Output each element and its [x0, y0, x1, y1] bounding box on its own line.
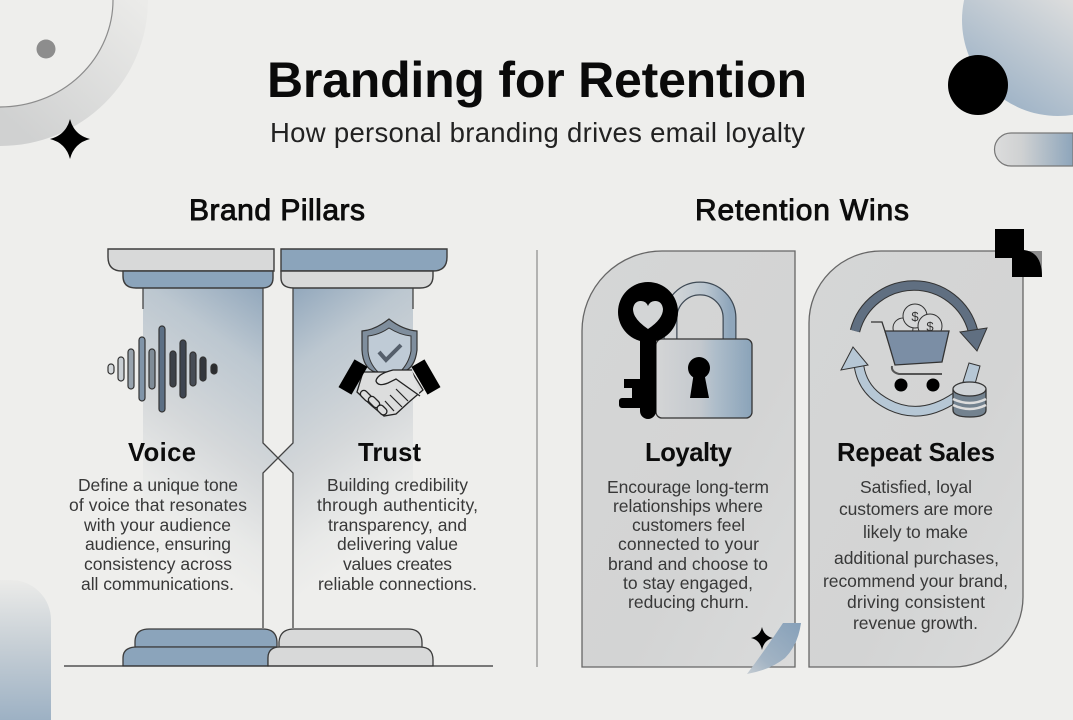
body: loyalty: customers feel — [632, 515, 745, 535]
body: voice: with your audience — [83, 515, 231, 535]
icon: sound wave — [108, 326, 217, 412]
body: voice: all communications. — [81, 574, 234, 594]
heading: Loyalty: Loyalty — [645, 439, 733, 467]
decoration: black corner shape — [995, 229, 1042, 277]
body: trust: through authenticity, — [317, 495, 478, 515]
decoration: top-right circles and pill — [948, 0, 1073, 166]
body: repeat sales: driving consistent — [847, 592, 985, 612]
body: repeat sales: recommend your brand, — [823, 571, 1008, 591]
body: repeat sales: revenue growth. — [853, 613, 978, 633]
divider — [536, 250, 538, 667]
icon: cart with cycle arrows and coins: $ — [926, 319, 934, 334]
subtitle: How personal branding drives email loyalty — [270, 117, 805, 148]
pillar shaft: voice — [143, 288, 278, 628]
body: voice: of voice that resonates — [69, 495, 247, 515]
title: Branding for Retention — [267, 52, 807, 108]
body: voice: audience, ensuring — [85, 534, 231, 554]
icon: cart with cycle arrows and coins: $ — [911, 309, 919, 324]
body: loyalty: reducing churn. — [628, 592, 749, 612]
icon: cart with cycle arrows and coins — [841, 285, 987, 417]
body: loyalty: connected to your — [618, 534, 759, 554]
body: voice: consistency across — [84, 554, 232, 574]
body: trust: delivering value — [337, 534, 458, 554]
decoration: bottom-left block — [0, 580, 51, 720]
capital: voice — [108, 249, 274, 288]
panel: repeat sales card — [809, 251, 1023, 667]
pillar shaft: trust — [278, 288, 413, 628]
panel: loyalty card — [582, 251, 801, 674]
card background — [809, 251, 1023, 667]
icon: padlock and key — [618, 282, 752, 419]
heading: Brand Pillars: Brand Pillars — [189, 194, 365, 227]
capital: trust — [281, 249, 447, 288]
text: trust — [317, 439, 478, 594]
body: loyalty: relationships where — [613, 496, 763, 516]
body: repeat sales: customers are more — [839, 499, 993, 519]
body: trust: values creates — [343, 554, 452, 574]
card background — [582, 251, 795, 667]
heading: Retention Wins: Retention Wins — [695, 194, 909, 227]
body: loyalty: Encourage long-term — [607, 477, 769, 497]
body: trust: Building credibility — [327, 475, 468, 495]
body: voice — [69, 475, 247, 594]
base: trust — [268, 629, 433, 666]
body: trust: transparency, and — [328, 515, 467, 535]
body: loyalty — [607, 477, 769, 612]
ground line — [64, 665, 493, 667]
body: repeat sales — [823, 477, 1008, 633]
decoration: top-left rings — [0, 0, 148, 146]
heading: Repeat Sales: Repeat Sales — [837, 439, 995, 467]
body: repeat sales: Satisfied, loyal — [860, 477, 972, 497]
decoration: curled corner — [747, 623, 801, 674]
icon: sparkle — [751, 627, 773, 650]
body: repeat sales: additional purchases, — [834, 548, 999, 568]
icon: shield and handshake — [339, 319, 440, 416]
body: voice: Define a unique tone — [78, 475, 238, 495]
body: repeat sales: likely to make — [863, 522, 968, 542]
icon: sparkle top-left — [50, 119, 90, 159]
pillar outlines — [143, 288, 413, 628]
base: voice — [123, 629, 277, 666]
body: trust: reliable connections. — [318, 574, 477, 594]
body: loyalty: to stay engaged, — [623, 573, 753, 593]
body: trust — [317, 475, 478, 594]
panel: brand pillars — [64, 249, 493, 666]
body: loyalty: brand and choose to — [608, 554, 768, 574]
heading: Trust: Trust — [358, 439, 421, 467]
heading: Voice: Voice — [128, 439, 196, 467]
text: voice — [69, 439, 247, 594]
